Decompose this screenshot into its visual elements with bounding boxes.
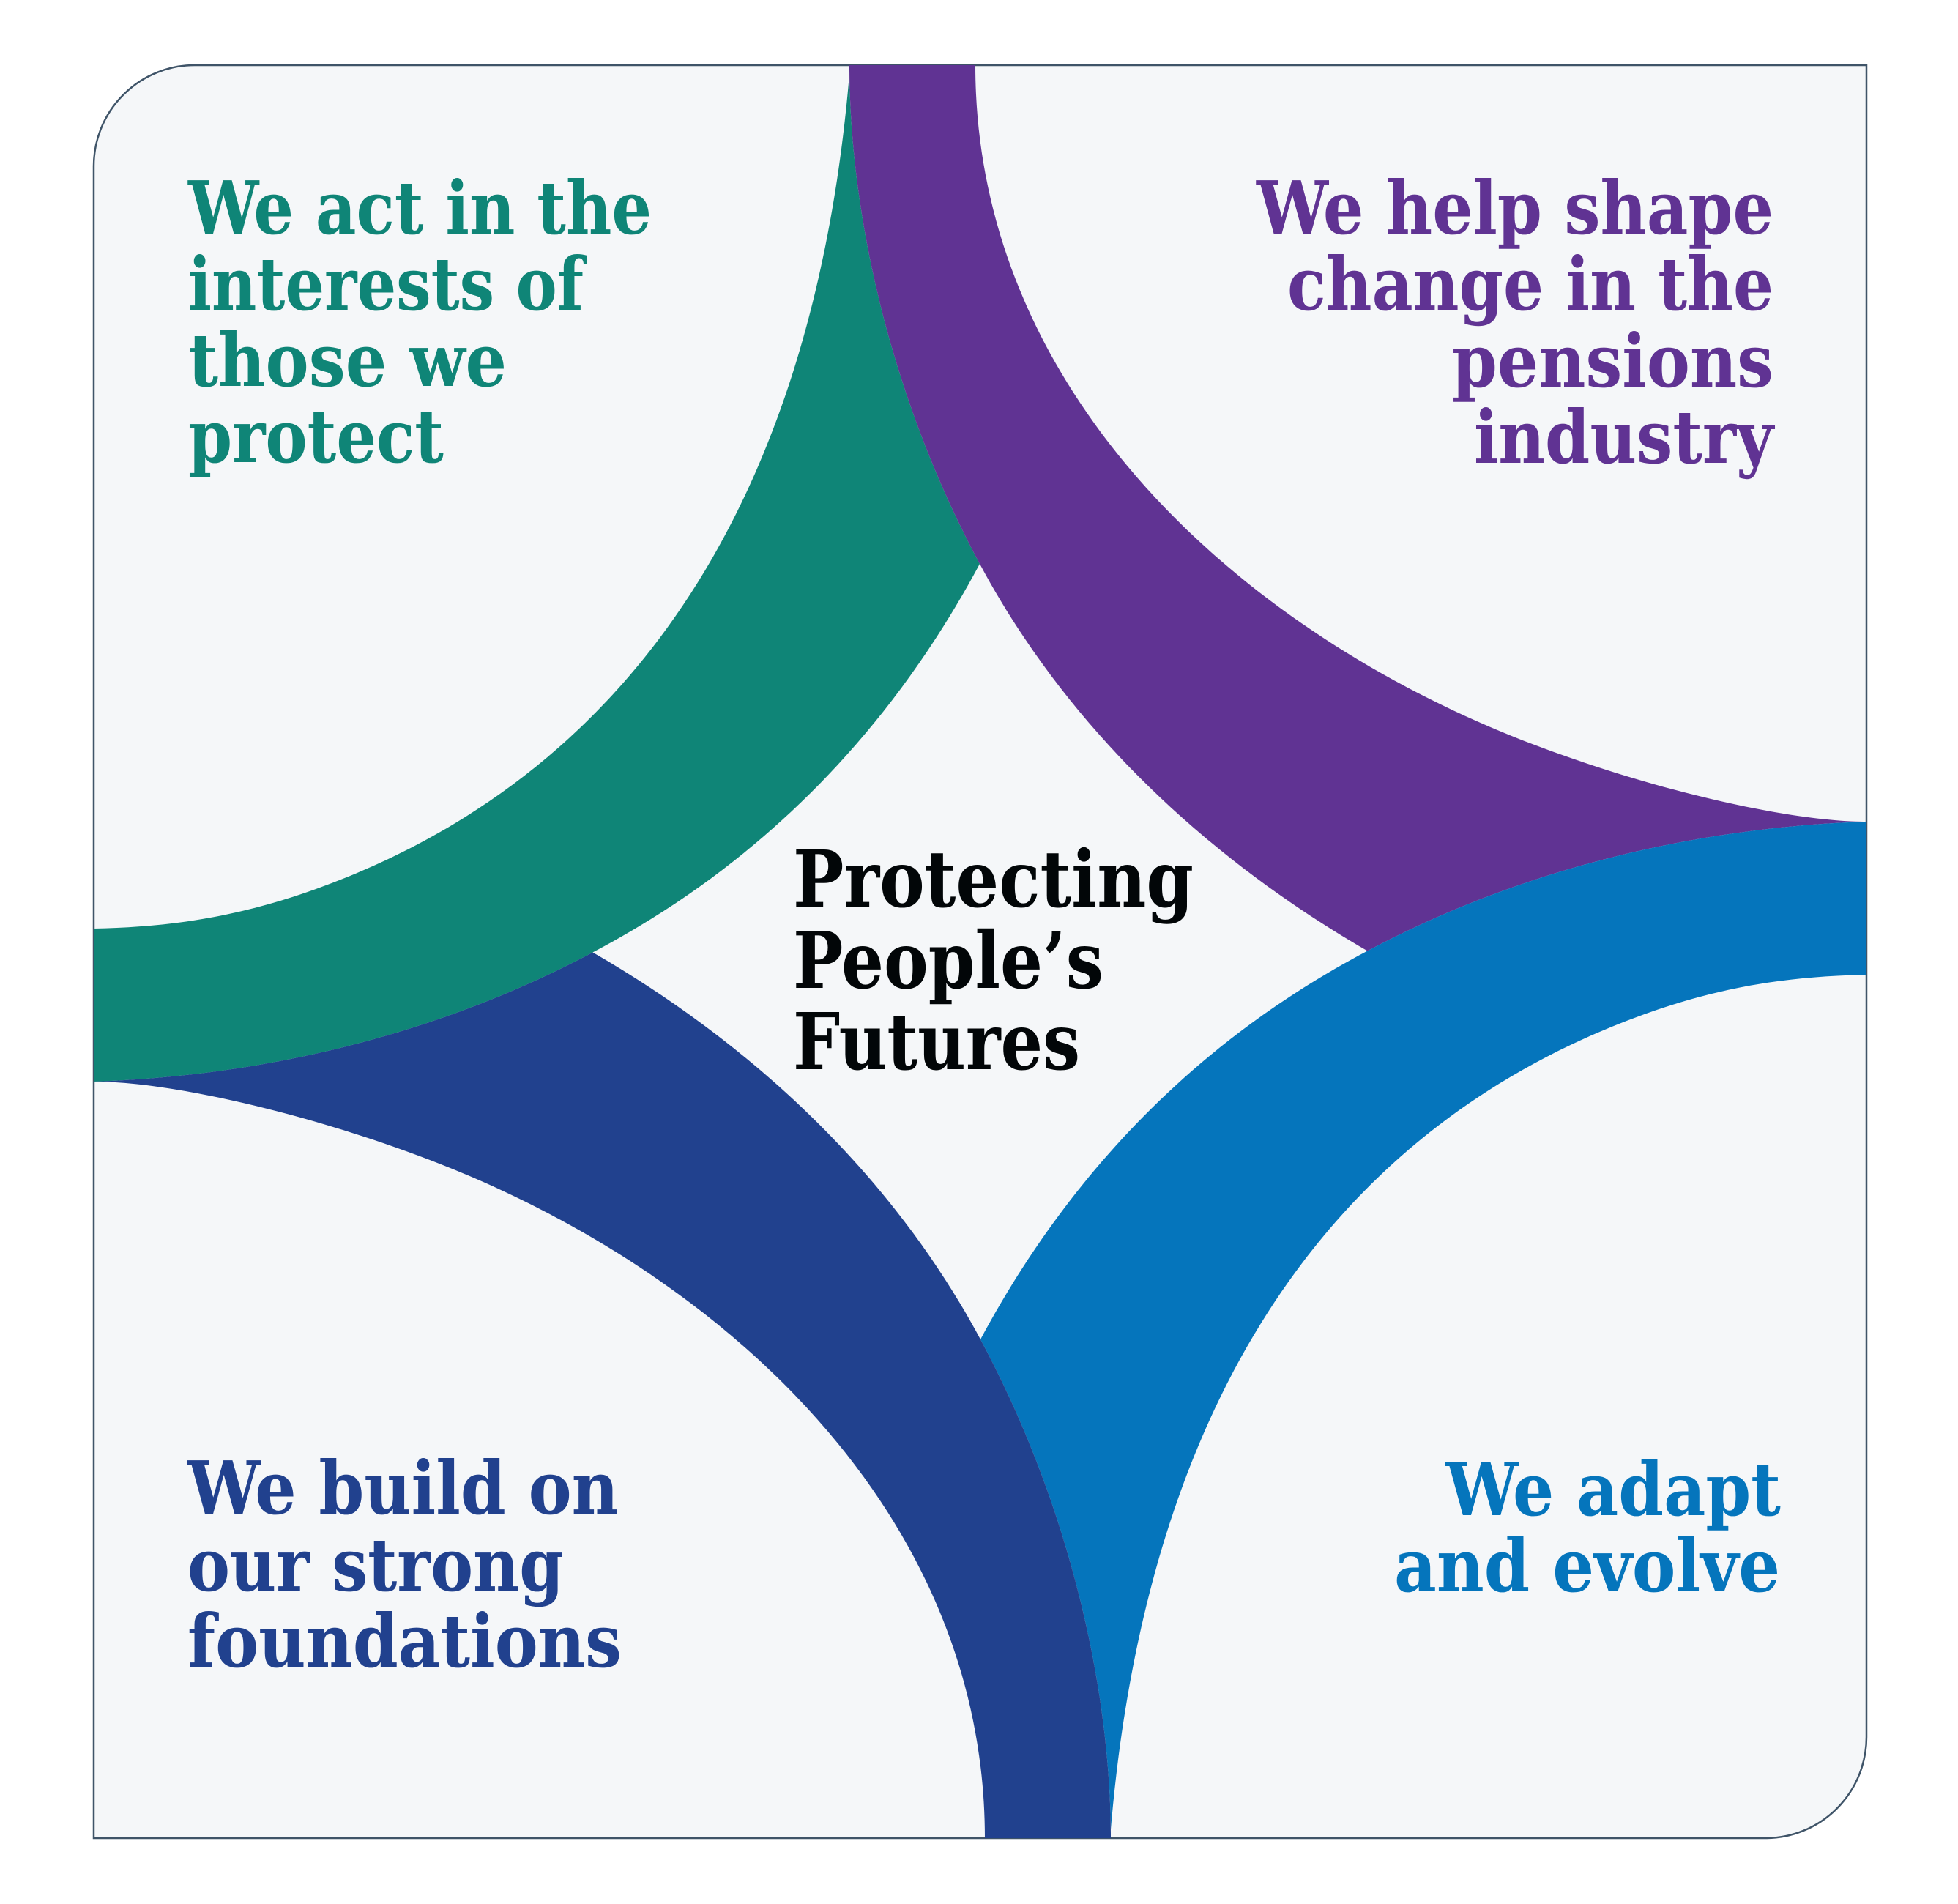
text: purple value: We help shape: [1256, 165, 1773, 251]
band: purple arc: [849, 65, 1866, 951]
text: teal value: [187, 165, 652, 480]
title: central message: Futures: [793, 997, 1080, 1088]
text: teal value: those we: [188, 317, 507, 404]
title: central message: [793, 834, 1194, 1088]
text: blue value: and evolve: [1394, 1522, 1780, 1609]
text: blue value: [1394, 1446, 1781, 1609]
text: teal value: interests of: [188, 241, 587, 327]
text: navy value: We build on: [187, 1445, 619, 1531]
title: central message: People’s: [793, 915, 1103, 1007]
text: purple value: change in the: [1287, 241, 1773, 327]
band: teal arc: [94, 65, 980, 1082]
band: navy arc: [94, 952, 1111, 1838]
text: purple value: [1256, 165, 1776, 480]
text: teal value: We act in the: [187, 165, 652, 251]
text: purple value: pensions: [1452, 318, 1773, 404]
text: blue value: We adapt: [1445, 1446, 1781, 1533]
text: teal value: protect: [188, 393, 444, 480]
title: central message: Protecting: [793, 834, 1194, 926]
band: blue arc: [980, 822, 1866, 1838]
text: purple value: industry: [1474, 394, 1776, 480]
text: navy value: foundations: [187, 1598, 622, 1684]
text: navy value: [187, 1445, 622, 1684]
text: navy value: our strong: [187, 1522, 564, 1608]
